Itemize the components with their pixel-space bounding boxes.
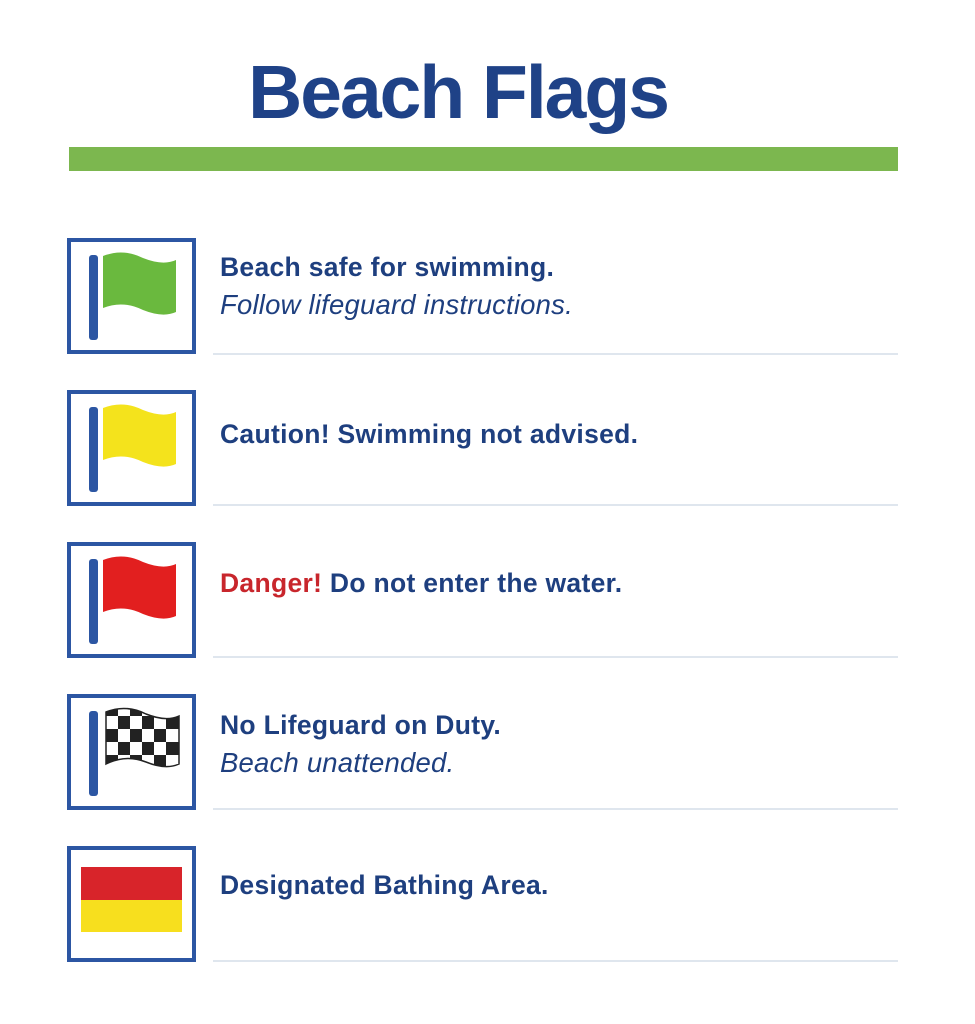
row: green flag bbox=[67, 238, 573, 354]
text: safe: Beach safe for swimming. bbox=[220, 252, 554, 282]
text: danger: Danger! Do not enter the water. bbox=[220, 568, 622, 598]
icon: red and yellow flag bbox=[67, 846, 196, 962]
text: no lifeguard bbox=[220, 710, 501, 778]
text: safe: Follow lifeguard instructions. bbox=[220, 289, 573, 320]
text: bathing area: Designated Bathing Area. bbox=[220, 870, 549, 900]
row: red/yellow flag bbox=[67, 846, 549, 962]
text: no lifeguard: No Lifeguard on Duty. bbox=[220, 710, 501, 740]
text: caution: Caution! Swimming not advised. bbox=[220, 419, 638, 449]
green header bar bbox=[69, 147, 898, 171]
icon: red flag bbox=[67, 542, 196, 658]
icon: checkered flag bbox=[67, 694, 196, 810]
text: safe bbox=[220, 252, 573, 320]
icon: yellow flag bbox=[67, 390, 196, 506]
row: red flag bbox=[67, 542, 622, 658]
title: Beach Flags bbox=[248, 50, 668, 134]
row: checkered flag bbox=[67, 694, 501, 810]
icon: green flag bbox=[67, 238, 196, 354]
row: yellow flag bbox=[67, 390, 638, 506]
text: no lifeguard: Beach unattended. bbox=[220, 747, 454, 778]
